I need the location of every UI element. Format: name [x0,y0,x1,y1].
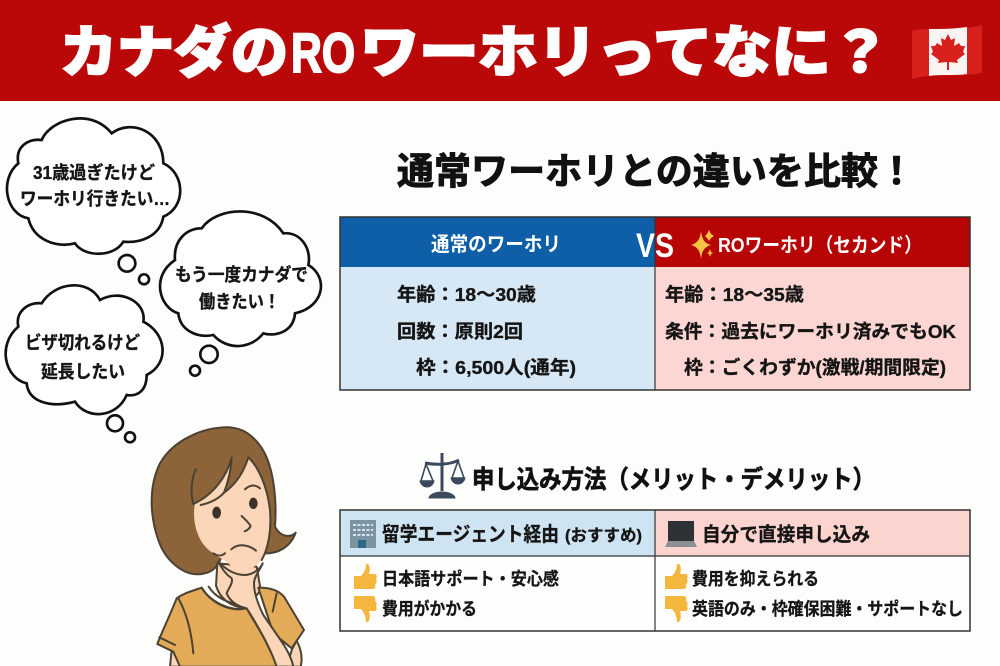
icon: thumbs down [665,596,688,622]
thought bubble: visa: 延長したい [41,362,125,382]
direct application pros and cons [665,564,963,622]
icon: laptop [665,521,697,547]
thought bubble: age: 31歳過ぎたけど [33,162,155,183]
VS badge: VS [636,227,674,265]
thought bubble: work again: 働きたい！ [199,292,280,312]
thought bubble: work again [160,211,321,376]
header: apply directly: 自分で直接申し込み [702,524,870,546]
table header: regular working holiday [340,217,655,267]
heading: comparison: 通常ワーホリとの違いを比較！ [397,151,915,192]
header: apply directly [655,510,970,556]
icon: thumbs down [354,596,377,622]
RO working holiday details: 年齢：18〜35歳 [665,284,804,305]
thought bubble: visa: ビザ切れるけど [25,332,140,353]
heading: application methods: 申し込み方法（メリット・デメリット） [472,465,875,494]
regular working holiday details: 枠：6,500人(通年) [416,357,576,378]
icon: thumbs up [354,564,377,589]
thought bubble: age [7,118,180,284]
comparison table [340,217,970,390]
title: カナダの [60,21,288,84]
regular working holiday details [397,284,576,378]
icon: sparkle [691,230,714,259]
icon: office building [350,520,376,548]
thought bubble: visa [6,285,163,442]
illustration: worried woman [152,427,304,666]
header: via agent [340,510,655,556]
table header: RO working holiday: ROワーホリ（セカンド） [718,234,922,257]
icon: thumbs up [665,564,688,589]
agent pros and cons: 日本語サポート・安心感 [382,569,559,589]
header banner [0,0,1000,101]
agent pros and cons: 費用がかかる [382,599,477,619]
RO working holiday details: 枠：ごくわずか(激戦/期間限定) [684,357,946,378]
header: via agent: 留学エージェント経由 [382,523,559,546]
agent pros and cons [354,564,559,622]
table header: regular working holiday: 通常のワーホリ [431,233,561,256]
thought bubble: work again: もう一度カナダで [175,264,308,285]
title [60,21,890,84]
icon: balance scale [420,453,465,498]
thought bubble: age: ワーホリ行きたい… [20,189,170,209]
direct application pros and cons: 費用を抑えられる [692,569,819,589]
regular working holiday details: 年齢：18〜30歳 [397,284,536,305]
direct application pros and cons: 英語のみ・枠確保困難・サポートなし [692,599,963,619]
application method table [340,510,970,631]
header: via agent: (おすすめ) [565,526,642,545]
RO working holiday details [665,284,957,378]
title: ワーホリってなに？ [360,21,890,84]
RO working holiday details: 条件：過去にワーホリ済みでもOK [665,321,957,342]
title: RO [291,21,355,84]
regular working holiday details: 回数：原則2回 [397,321,523,342]
table header: RO working holiday [655,217,970,267]
icon: Canadian flag [912,25,982,79]
